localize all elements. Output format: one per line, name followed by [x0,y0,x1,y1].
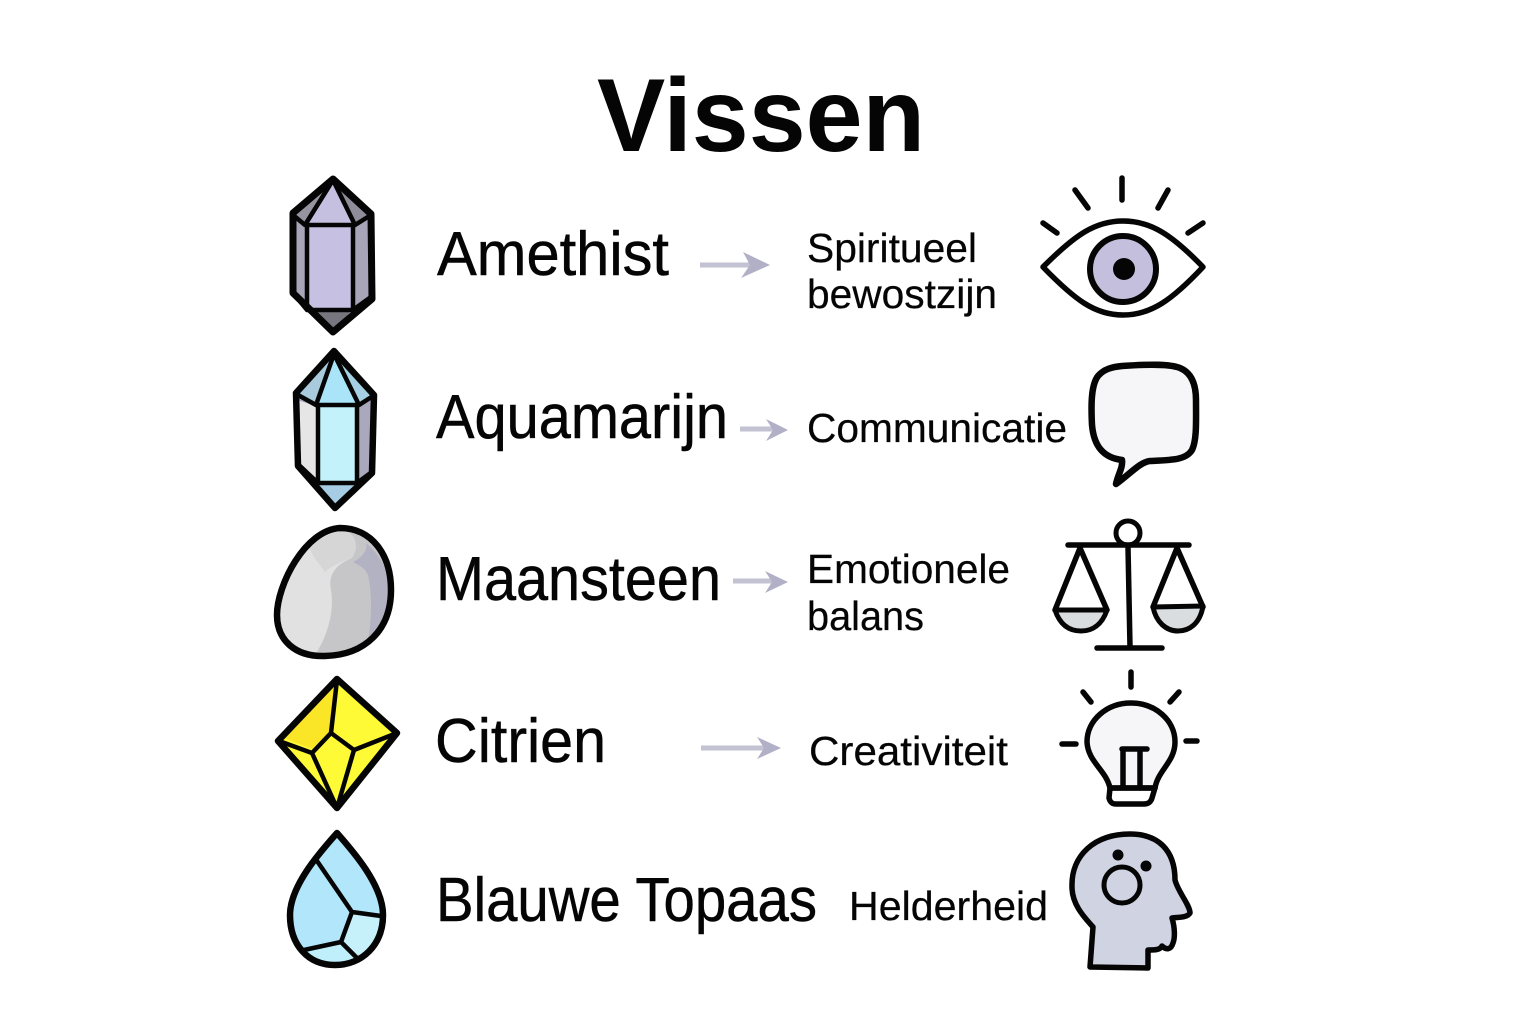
icon: citrine gem [277,678,398,810]
icon: speech bubble [1092,365,1196,484]
title: Vissen [597,58,925,174]
row: Blauwe Topaas [290,832,1190,968]
text: Creativiteit: Creativiteit [809,728,1009,774]
label: Citrien: Citrien [435,707,606,776]
icon: eye [1043,178,1203,315]
row: Amethist [292,177,1203,335]
row: Citrien [277,672,1197,810]
icon: aquamarine crystal [295,349,375,510]
row: Maansteen [277,521,1203,656]
text: Emotionele balans: balans [807,593,924,639]
icon: amethyst crystal [292,177,372,335]
row: Aquamarijn [295,349,1196,510]
text: Emotionele balans [807,546,1010,639]
label: Blauwe Topaas: Blauwe Topaas [436,866,817,935]
text: Emotionele balans: Emotionele [807,546,1010,592]
label: Aquamarijn: Aquamarijn [436,383,728,452]
text: Helderheid: Helderheid [849,883,1048,929]
text: Spiritueel bewustzijn: bewostzijn [807,271,997,317]
label: Amethist: Amethist [437,220,669,289]
text: Spiritueel bewustzijn: Spiritueel [807,225,977,271]
arrow [740,419,788,441]
text: Spiritueel bewustzijn [807,225,997,317]
icon: head profile [1072,834,1190,968]
icon: scales [1055,521,1203,648]
label: Maansteen: Maansteen [436,545,721,614]
arrow [733,571,788,593]
icon: light bulb [1062,672,1197,804]
icon: moonstone [277,528,391,656]
icon: blue topaz [290,832,383,965]
arrow [701,737,781,759]
arrow [700,252,770,278]
text: Communicatie: Communicatie [807,405,1067,451]
